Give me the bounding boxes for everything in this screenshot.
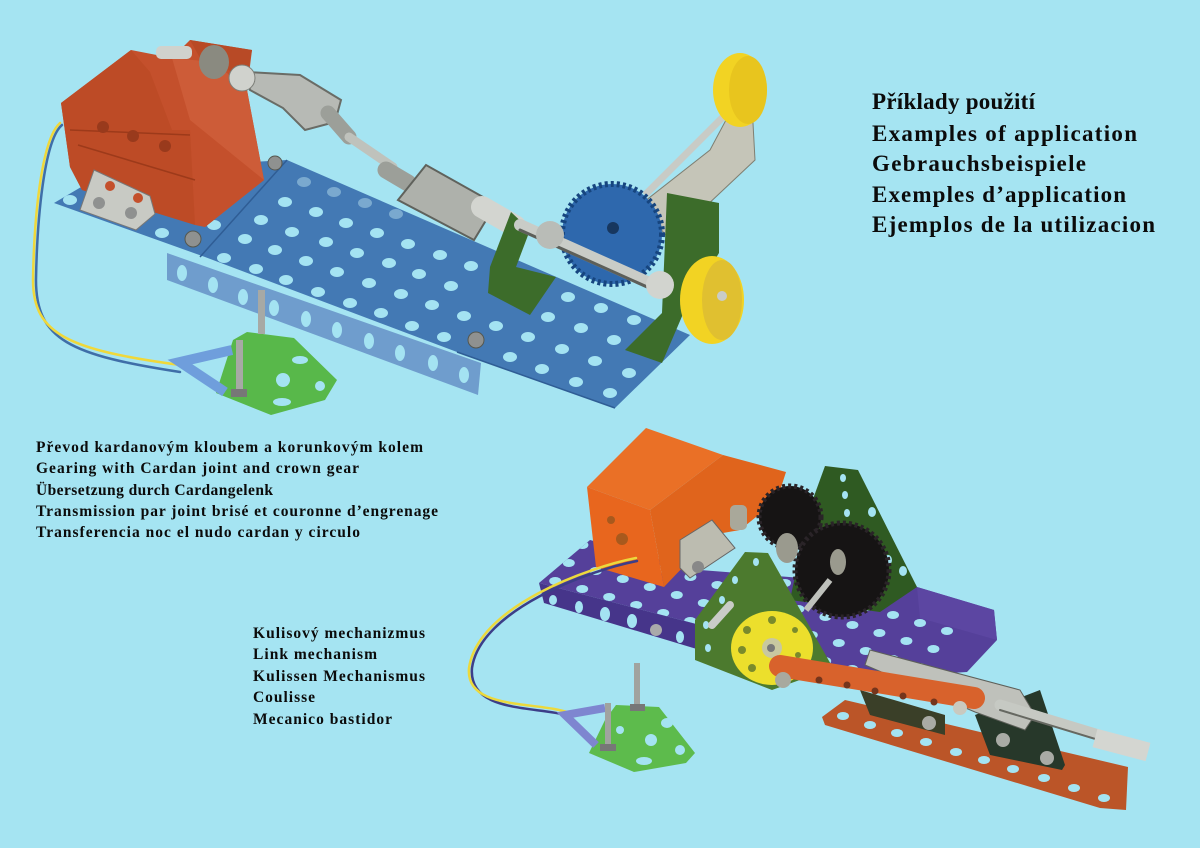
metal motor bracket — [80, 170, 155, 230]
orange link arm — [775, 666, 974, 715]
orange motor — [61, 40, 264, 227]
purple side flange — [539, 583, 700, 650]
yellow disc — [731, 611, 813, 685]
caption: link mechanism: Coulisse — [253, 689, 315, 706]
silver slide and rod — [865, 650, 1148, 752]
caption: link mechanism: Link mechanism — [253, 646, 377, 663]
model: link mechanism — [469, 428, 1148, 810]
caption: link mechanism: Kulisový mechanizmus — [253, 625, 425, 642]
caption: link mechanism: Mecanico bastidor — [253, 711, 392, 728]
caption: cardan gearing: Převod kardanovým kloubem a korunkovým kolem — [36, 439, 423, 456]
blue side flange with slots — [167, 253, 481, 395]
caption: link mechanism: Kulissen Mechanismus — [253, 668, 425, 685]
silver upright bracket and axle — [640, 94, 755, 240]
purple base plate — [539, 540, 997, 673]
motor bracket — [680, 505, 747, 578]
yellow pulleys — [680, 53, 767, 344]
pinion at motor shaft — [156, 45, 229, 79]
wire to motor — [33, 123, 180, 372]
contact plate with screws — [565, 663, 695, 772]
orange angle strip — [822, 700, 1128, 810]
cardan shaft — [229, 65, 515, 240]
title: multilingual heading: Příklady použití — [872, 89, 1036, 114]
wire to motor — [469, 558, 637, 717]
caption: cardan gearing: Transmission par joint brisé et couronne d’engrenage — [36, 503, 438, 520]
title: multilingual heading: Ejemplos de la utilizacion — [872, 212, 1155, 237]
green angle brackets — [488, 193, 719, 363]
title: multilingual heading: Gebrauchsbeispiele — [872, 151, 1086, 176]
caption: cardan gearing: Übersetzung durch Cardangelenk — [36, 482, 273, 499]
back green triangle — [790, 466, 917, 612]
caption: cardan gearing — [36, 439, 438, 541]
caption: cardan gearing: Gearing with Cardan joint and crown gear — [36, 460, 359, 477]
plate screws — [185, 156, 484, 348]
black gears — [759, 486, 889, 617]
title: multilingual heading: Exemples d’application — [872, 182, 1126, 207]
dark green bracket — [860, 690, 1065, 770]
contact plate with screws — [180, 290, 337, 415]
model: cardan joint and crown gear — [33, 40, 767, 415]
blue base plate — [54, 160, 690, 408]
title: multilingual heading: Examples of application — [872, 121, 1137, 146]
title: multilingual heading — [872, 89, 1155, 237]
blue crown gear — [562, 184, 662, 284]
front green triangle — [695, 552, 833, 690]
caption: cardan gearing: Transferencia noc el nudo cardan y circulo — [36, 524, 360, 541]
caption: link mechanism — [253, 625, 425, 728]
orange motor — [587, 428, 786, 587]
drive shaft and pinion — [520, 221, 674, 299]
